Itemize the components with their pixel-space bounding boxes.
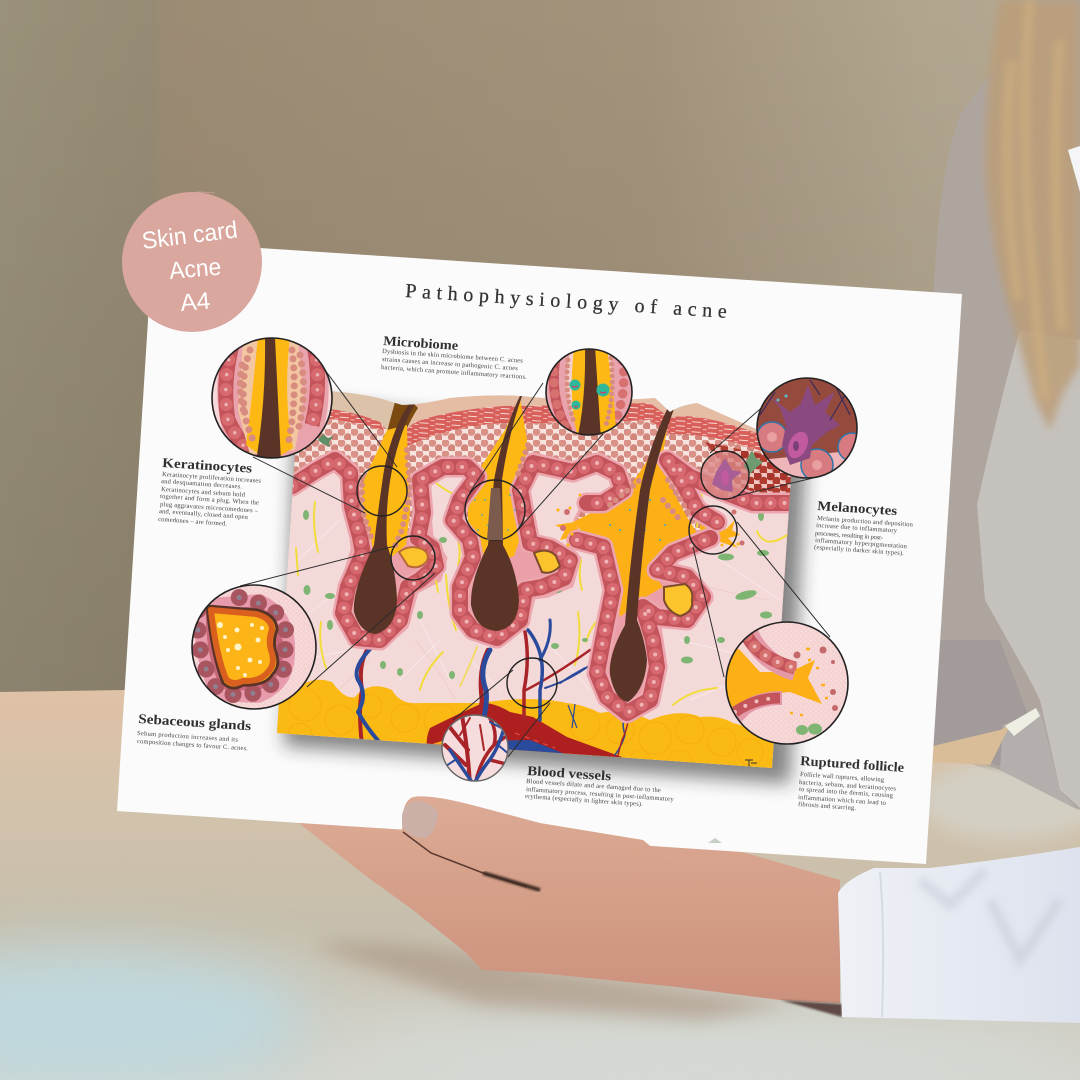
skin cross-section — [277, 391, 791, 768]
text block: microbiome: Microbiome — [383, 333, 459, 353]
dermis — [270, 470, 800, 780]
text block: keratinocytes: and desquamation decreases. — [161, 478, 243, 491]
lens: sebaceous glands — [192, 536, 435, 709]
skin illustration — [270, 370, 810, 784]
lens: microbiome — [465, 345, 632, 540]
text block: melanocytes: (especially in darker skin types). — [814, 544, 905, 557]
text block: ruptured follicle — [798, 753, 905, 812]
text block: sebaceous glands: Sebum production increases and its — [137, 730, 239, 744]
sebaceous glands — [399, 547, 692, 616]
lens: blood vessels — [442, 658, 557, 785]
hand: thumb and back of hand over the card — [402, 796, 842, 1017]
text block: blood vessels: erythema (especially in lighter skin types). — [525, 793, 643, 808]
lens: keratinocytes — [212, 335, 407, 516]
signature mark — [745, 760, 757, 767]
text block: sebaceous glands — [137, 711, 252, 752]
bacteria: green clusters — [303, 510, 772, 679]
sebum plugs — [358, 398, 740, 617]
text block: keratinocytes: together and form a plug. When the — [160, 493, 259, 507]
text block: keratinocytes: and, eventually, closed and open — [159, 508, 249, 521]
text block: keratinocytes: Keratinocytes — [162, 455, 253, 476]
epidermis layers — [290, 403, 800, 530]
icon: thumbnail — [402, 801, 438, 838]
text block: keratinocytes: plug aggravates microcomedones – — [160, 501, 259, 515]
text block: melanocytes: increase due to inflammatory — [816, 522, 898, 535]
badge: skin card: Acne — [168, 254, 222, 285]
text block: melanocytes: Melanocytes — [817, 498, 898, 518]
keratinocyte clusters — [362, 445, 690, 548]
text block: ruptured follicle: to spread into the dermis, causing — [799, 786, 894, 799]
text block: melanocytes: Melanin production and deposition — [817, 515, 914, 529]
person: blouse — [920, 0, 1080, 810]
hair shafts and bulbs — [354, 396, 674, 702]
subcutaneous fat — [277, 680, 774, 768]
text block: microbiome — [381, 333, 527, 381]
text block: microbiome: Dysbiosis in the skin microbiome between C. acnes — [382, 348, 523, 365]
vessels below follicles — [357, 620, 628, 755]
text block: melanocytes — [814, 498, 914, 557]
text block: sebaceous glands: Sebaceous glands — [138, 711, 252, 733]
rupture splatter — [556, 494, 744, 547]
stratum corneum — [277, 391, 791, 768]
dermis fibres — [298, 520, 780, 700]
text block: blood vessels: inflammatory process, resulting in post-inflammatory — [526, 786, 675, 803]
text block: microbiome: strains causes an increase in pathogenic C. acnes — [382, 356, 518, 372]
background: table — [0, 690, 1080, 1080]
text block: melanocytes: inflammatory hyperpigmentation — [815, 537, 908, 550]
sleeve — [838, 847, 1080, 1023]
hand: fingers under the card — [295, 800, 840, 1003]
lens: ruptured follicle — [689, 506, 848, 744]
background: wall — [0, 0, 1080, 700]
teal specks in the second follicle — [474, 494, 521, 531]
large blood vessels — [426, 703, 622, 758]
title: Pathophysiology of acne — [405, 280, 728, 323]
hair follicle cell walls — [292, 460, 795, 713]
text block: ruptured follicle: inflammation which can lead to — [798, 794, 886, 807]
card: paper sheet — [117, 241, 962, 864]
text block: ruptured follicle: fibrosis and scarring. — [798, 801, 857, 812]
text block: sebaceous glands: composition changes to favour C. acnes. — [137, 738, 248, 752]
text block: ruptured follicle: Ruptured follicle — [800, 753, 905, 775]
text block: ruptured follicle: Follicle wall ruptures, allowing — [800, 771, 885, 784]
badge: skin card: A4 — [179, 287, 211, 317]
text block: blood vessels: Blood vessels dilate and are damaged due to the — [526, 778, 661, 794]
text block: blood vessels — [525, 763, 675, 808]
badge: skin card — [122, 192, 262, 332]
text block: ruptured follicle: bacteria, sebum, and keratinocytes — [799, 779, 897, 793]
green melanocyte marker — [318, 434, 334, 447]
text block: blood vessels: Blood vessels — [527, 763, 612, 783]
text block: keratinocytes — [158, 455, 262, 528]
badge: skin card: Skin card — [140, 216, 239, 255]
yellow fibres — [296, 483, 787, 705]
text block: keratinocytes: Keratinocyte proliferation increases — [162, 471, 262, 485]
text block: keratinocytes: Keratinocytes and sebum hold — [161, 486, 246, 499]
person: hair — [985, 0, 1080, 430]
paper nick — [708, 838, 722, 843]
lens: melanocytes — [701, 378, 866, 499]
text block: microbiome: bacteria, which can promote inflammatory reactions. — [381, 364, 527, 381]
illustration shadow — [284, 400, 806, 784]
text block: keratinocytes: comedones – are formed. — [158, 516, 228, 528]
melanocyte in epidermis — [701, 450, 763, 499]
text block: melanocytes: processes, resulting in post- — [815, 530, 883, 542]
